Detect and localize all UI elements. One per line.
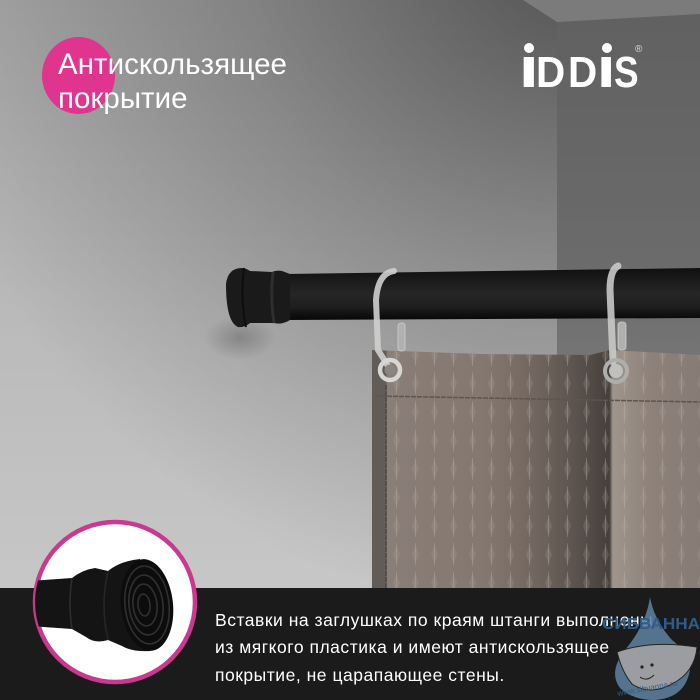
curtain rings — [376, 266, 627, 382]
caption text: Вставки на заглушках по краям штанги выполнены — [215, 610, 653, 630]
IDDIS logo — [519, 43, 643, 91]
bottom caption bar — [0, 588, 700, 700]
right wall — [557, 0, 700, 700]
corner shading — [0, 0, 558, 700]
heading — [58, 48, 287, 115]
heading: покрытие — [58, 82, 188, 115]
inset: rod end cap close-up — [32, 520, 198, 684]
caption text: из мягкого пластика и имеют антискользящее — [215, 637, 610, 657]
caption text: покрытие, не царапающее стены. — [215, 665, 505, 685]
watermark: water drop with bath: СИБВАННА — [602, 616, 700, 633]
watermark: water drop with bath — [602, 597, 700, 700]
clip tips behind curtain rings — [398, 322, 626, 351]
ceiling — [523, 0, 700, 22]
caption text — [215, 610, 653, 685]
IDDIS logo: ® — [635, 44, 643, 55]
curtain — [372, 350, 700, 588]
watermark: water drop with bath: www.sibvanna.ru — [616, 679, 678, 698]
curtain rod — [226, 268, 700, 327]
rod shadow on wall — [204, 316, 276, 360]
heading: Антискользящее — [58, 48, 287, 81]
left wall — [0, 0, 558, 700]
pink accent circle — [42, 37, 115, 114]
